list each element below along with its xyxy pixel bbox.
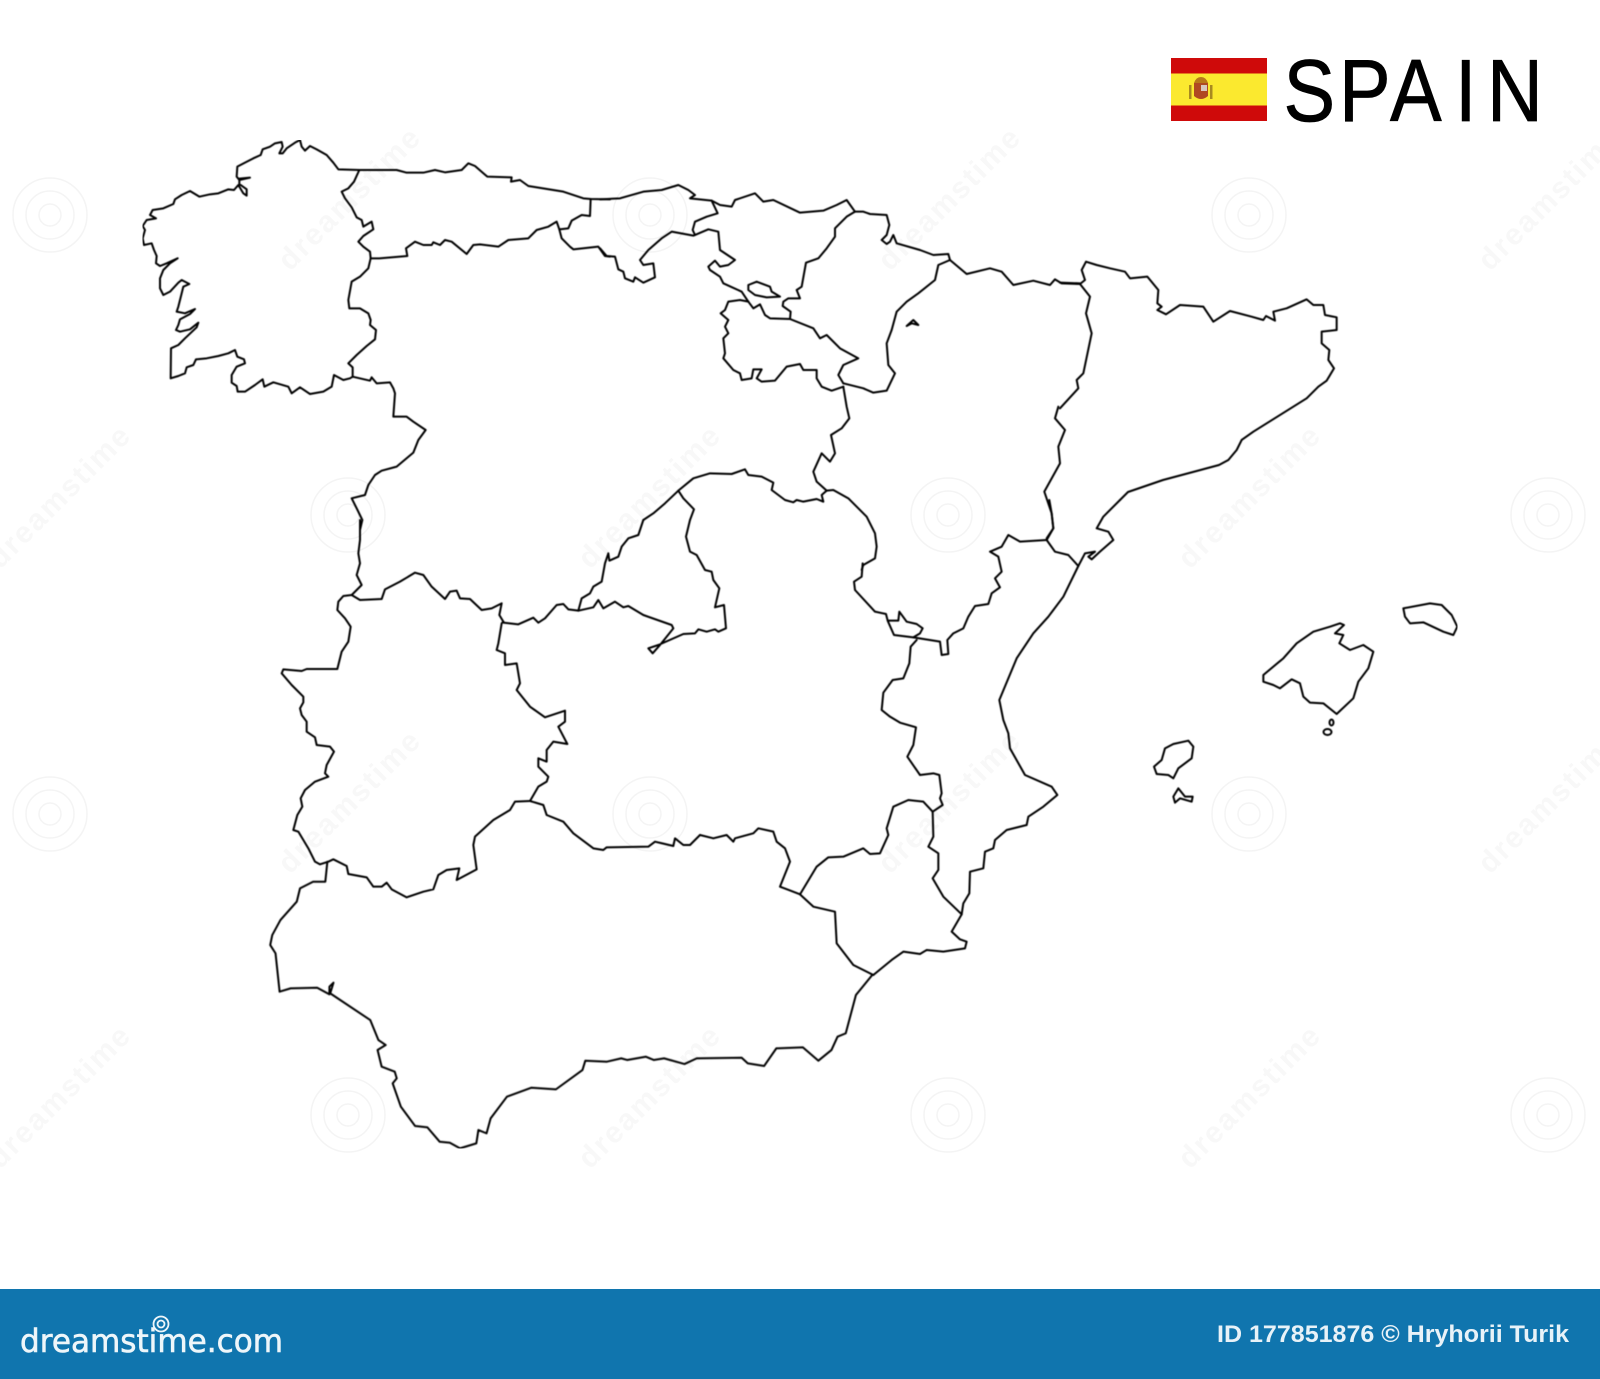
region: Castilla y Leon west border — [352, 377, 426, 595]
region: Murcia — [800, 800, 933, 975]
watermark text: dreamstime — [1172, 1018, 1328, 1175]
region: Extremadura — [282, 573, 567, 897]
footer band — [0, 1289, 1600, 1379]
region: Castilla-La Mancha — [530, 640, 943, 894]
map of Spain regions — [143, 140, 1457, 1148]
watermark text: dreamstime — [872, 723, 1028, 880]
region: Aragon — [827, 260, 1080, 655]
region: Andalusia — [270, 862, 872, 1148]
watermark text: dreamstime — [572, 418, 728, 575]
region: Cantabria and Basque Country — [600, 185, 950, 319]
watermark text: dreamstime — [572, 1018, 728, 1175]
region: Balearic Islands — [1154, 603, 1457, 803]
region: Navarre — [843, 260, 950, 393]
region: La Rioja — [721, 300, 858, 391]
icon: coat of arms — [1189, 77, 1212, 99]
region: Catalonia — [1047, 262, 1337, 566]
flag of Spain — [1171, 58, 1267, 121]
watermark text: dreamstime — [872, 120, 1028, 277]
watermark text: dreamstime — [272, 120, 428, 277]
icon: logo spiral — [154, 1316, 168, 1332]
watermark text — [0, 120, 1600, 1175]
region: Valencia — [873, 566, 1078, 975]
watermark text: dreamstime — [272, 723, 428, 880]
brand logo text: dreamstime.com — [20, 1322, 283, 1360]
region: Asturias — [359, 163, 610, 258]
watermark spirals — [13, 178, 1585, 1152]
region: Madrid — [578, 491, 726, 653]
watermark text: dreamstime — [1172, 418, 1328, 575]
region: Castilla y Leon east and south border — [503, 387, 849, 624]
image id and credit: ID 177851876 © Hryhorii Turik — [1217, 1321, 1570, 1348]
region: Galicia — [143, 140, 376, 394]
title: SPAIN — [1283, 41, 1543, 140]
